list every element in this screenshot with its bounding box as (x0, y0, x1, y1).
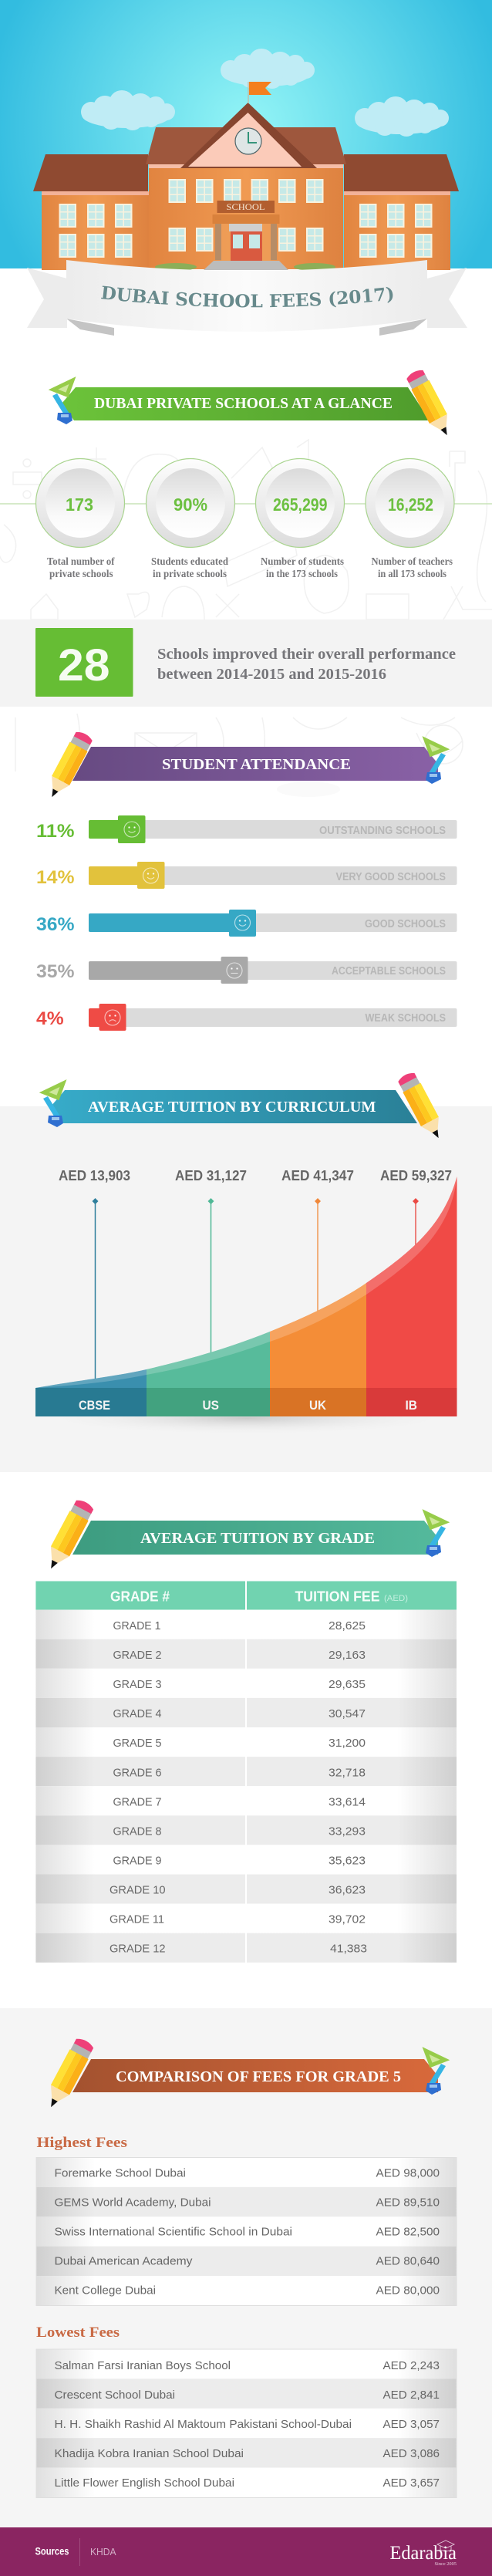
table rows: 29,635 (329, 1678, 366, 1691)
table: highest fees: Kent College Dubai (54, 2284, 156, 2297)
area chart: tuition by curriculum (35, 1157, 457, 1435)
section banner: average tuition by curriculum (43, 1070, 447, 1143)
callout text: between 2014-2015 and 2015-2016 (157, 666, 386, 683)
table rows: 33,293 (329, 1825, 366, 1838)
table: lowest fees: H. H. Shaikh Rashid Al Maktoum Pakistani School-Dubai (54, 2418, 352, 2431)
bar: weak 4%: WEAK SCHOOLS (366, 1012, 446, 1025)
bar: weak 4%: 4% (36, 1008, 64, 1029)
table header: TUITION FEE (295, 1589, 379, 1605)
area segments (35, 1177, 457, 1388)
table: tuition by grade (35, 1582, 457, 1963)
table rows: 35,623 (329, 1855, 366, 1867)
stat: 90 percent: 90% (174, 495, 207, 515)
table rows: GRADE 5 (113, 1737, 162, 1750)
bar: good 36% (36, 910, 457, 937)
stat: 90 percent: in private schools (153, 569, 227, 580)
table: lowest fees: Khadija Kobra Iranian School Dubai (54, 2447, 244, 2460)
heading: highest fees: Highest Fees (37, 2135, 127, 2151)
curriculum labels strip: US (202, 1398, 219, 1413)
icon: ruler and sharpener (52, 380, 72, 424)
stat: 90 percent: Students educated (151, 556, 228, 568)
table: lowest fees: AED 3,657 (382, 2476, 440, 2490)
section banner: average tuition by grade (42, 1497, 446, 1574)
clock (235, 128, 261, 154)
icon: pencil (396, 1070, 447, 1143)
heading: STUDENT ATTENDANCE (162, 757, 351, 773)
stat: 265,299 students: in the 173 schools (266, 569, 338, 580)
logo: Edarabia: Since 2005 (435, 2562, 457, 2567)
table: highest fees: AED 80,640 (376, 2254, 440, 2268)
hero illustration: school under blue sky (0, 0, 492, 271)
attendance bars (36, 815, 457, 1031)
table: highest fees: AED 80,000 (376, 2284, 440, 2297)
stats row (0, 458, 492, 580)
bar: acceptable 35%: 35% (36, 961, 74, 982)
cloud: right (355, 96, 449, 137)
value labels (59, 1168, 452, 1183)
stat: 16,252 teachers: 16,252 (388, 495, 433, 515)
table rows: GRADE 1 (113, 1619, 160, 1632)
stat: 265,299 students (256, 458, 344, 580)
table rows: 36,623 (329, 1884, 366, 1896)
table: highest fees: Swiss International Scientific School in Dubai (54, 2225, 292, 2239)
table header: (AED) (384, 1594, 408, 1603)
section banner: student attendance (43, 729, 446, 802)
callout text: Schools improved their overall performance (157, 646, 456, 663)
icon: ruler and sharpener (426, 1513, 446, 1557)
bar: very good 14%: 14% (36, 867, 74, 888)
stat: 16,252 teachers: in all 173 schools (378, 569, 447, 580)
logo: Edarabia: Edarabia (390, 2543, 457, 2564)
table rows (35, 1609, 457, 1963)
heading: AVERAGE TUITION BY CURRICULUM (88, 1099, 376, 1116)
sources: KHDA (90, 2547, 116, 2557)
title: DUBAI SCHOOL FEES (2017) (101, 285, 393, 307)
curriculum labels strip: UK (309, 1398, 327, 1413)
stat: 173 schools: Total number of (47, 556, 115, 568)
table: lowest fees (36, 2349, 457, 2498)
sources (35, 2538, 116, 2566)
stat: 173 schools (35, 458, 125, 580)
table: lowest fees: AED 3,086 (382, 2447, 440, 2460)
table rows: GRADE 7 (113, 1796, 162, 1808)
value labels: AED 41,347 (281, 1168, 354, 1183)
table rows: GRADE 4 (113, 1707, 162, 1720)
table rows: GRADE 2 (113, 1649, 162, 1662)
table: lowest fees: Little Flower English School Dubai (54, 2476, 234, 2490)
title ribbon (27, 260, 467, 336)
school sign: SCHOOL (227, 201, 265, 212)
icon: ruler and sharpener (426, 2051, 446, 2095)
table: highest fees: AED 89,510 (376, 2196, 440, 2210)
table rows: GRADE 6 (113, 1767, 162, 1779)
table: highest fees: GEMS World Academy, Dubai (54, 2196, 211, 2210)
bar: outstanding 11% (36, 815, 457, 843)
table rows: 39,702 (329, 1913, 366, 1926)
table rows: GRADE 8 (113, 1825, 162, 1838)
sources: Sources (35, 2544, 69, 2557)
table: highest fees (36, 2157, 457, 2305)
callout text (157, 646, 456, 683)
icon: ruler and sharpener (426, 740, 446, 784)
bar: good 36%: GOOD SCHOOLS (365, 918, 446, 930)
cloud: top centre (221, 49, 315, 89)
cloud: left (81, 90, 175, 130)
stat: 16,252 teachers: Number of teachers (372, 556, 453, 568)
table: highest fees: Foremarke School Dubai (54, 2166, 186, 2180)
bar: outstanding 11%: 11% (36, 821, 74, 842)
stat: 90 percent (147, 458, 234, 580)
table rows: 31,200 (329, 1737, 366, 1750)
table header: GRADE # (110, 1589, 170, 1605)
stat: 265,299 students: Number of students (261, 556, 344, 568)
table rows: 33,614 (329, 1796, 366, 1808)
bar: outstanding 11%: OUTSTANDING SCHOOLS (319, 825, 446, 837)
stat: 16,252 teachers (366, 458, 454, 580)
curriculum labels strip (35, 1388, 457, 1416)
icon: pencil (43, 729, 94, 802)
heading: COMPARISON OF FEES FOR GRADE 5 (116, 2069, 401, 2085)
bar: acceptable 35% (36, 957, 457, 984)
bar: weak 4% (36, 1004, 457, 1031)
section banner: comparison of fees for grade 5 (42, 2036, 446, 2112)
icon: pencil (42, 1497, 96, 1574)
curriculum labels strip: IB (406, 1398, 417, 1413)
heading: AVERAGE TUITION BY GRADE (140, 1531, 375, 1547)
table: lowest fees: AED 2,243 (382, 2359, 440, 2372)
bar: very good 14%: VERY GOOD SCHOOLS (336, 871, 446, 883)
icon: pencil (42, 2036, 96, 2112)
stat: 173 schools: private schools (49, 569, 113, 580)
table: lowest fees: AED 2,841 (382, 2389, 440, 2402)
table rows: 30,547 (329, 1707, 366, 1720)
number: 28 (58, 640, 110, 690)
table: highest fees: Dubai American Academy (54, 2254, 193, 2268)
table rows: GRADE 12 (110, 1943, 165, 1955)
bar: good 36%: 36% (36, 914, 74, 935)
table rows: GRADE 9 (113, 1855, 162, 1867)
callout: 28 schools improved (0, 620, 492, 707)
stat: 265,299 students: 265,299 (273, 495, 327, 515)
table rows: 29,163 (329, 1649, 366, 1662)
table rows: GRADE 3 (113, 1678, 162, 1691)
stat: 173 schools: 173 (66, 495, 93, 515)
table header (35, 1582, 457, 1610)
heading: DUBAI PRIVATE SCHOOLS AT A GLANCE (94, 396, 393, 412)
shadow under chart (39, 1401, 455, 1435)
bar: acceptable 35%: ACCEPTABLE SCHOOLS (332, 965, 446, 977)
heading: lowest fees: Lowest Fees (36, 2324, 120, 2341)
school building (33, 103, 459, 271)
table: lowest fees: Crescent School Dubai (54, 2389, 175, 2402)
value labels: AED 31,127 (175, 1168, 247, 1183)
table: lowest fees: Salman Farsi Iranian Boys School (54, 2359, 231, 2372)
decorative doodles (0, 440, 492, 797)
table: highest fees: AED 98,000 (376, 2166, 440, 2180)
section banner: Dubai private schools at a glance (52, 367, 456, 440)
footer (0, 2527, 492, 2576)
icon: pencil (405, 367, 456, 440)
value labels: AED 13,903 (59, 1168, 130, 1183)
icon: ruler and sharpener (43, 1083, 63, 1127)
bar: very good 14% (36, 862, 457, 889)
school sign (217, 201, 275, 213)
table: lowest fees: AED 3,057 (382, 2418, 440, 2431)
green number box (35, 628, 133, 697)
table rows: 32,718 (329, 1767, 366, 1779)
table: highest fees: AED 82,500 (376, 2225, 440, 2239)
curriculum labels strip: CBSE (79, 1398, 110, 1413)
table rows: 28,625 (329, 1619, 366, 1632)
value labels: AED 59,327 (380, 1168, 452, 1183)
table rows: GRADE 11 (110, 1913, 164, 1926)
leader lines (93, 1198, 419, 1381)
sky (0, 0, 492, 268)
flag (248, 82, 271, 103)
table rows: GRADE 10 (110, 1884, 165, 1896)
table rows: 41,383 (330, 1943, 367, 1955)
